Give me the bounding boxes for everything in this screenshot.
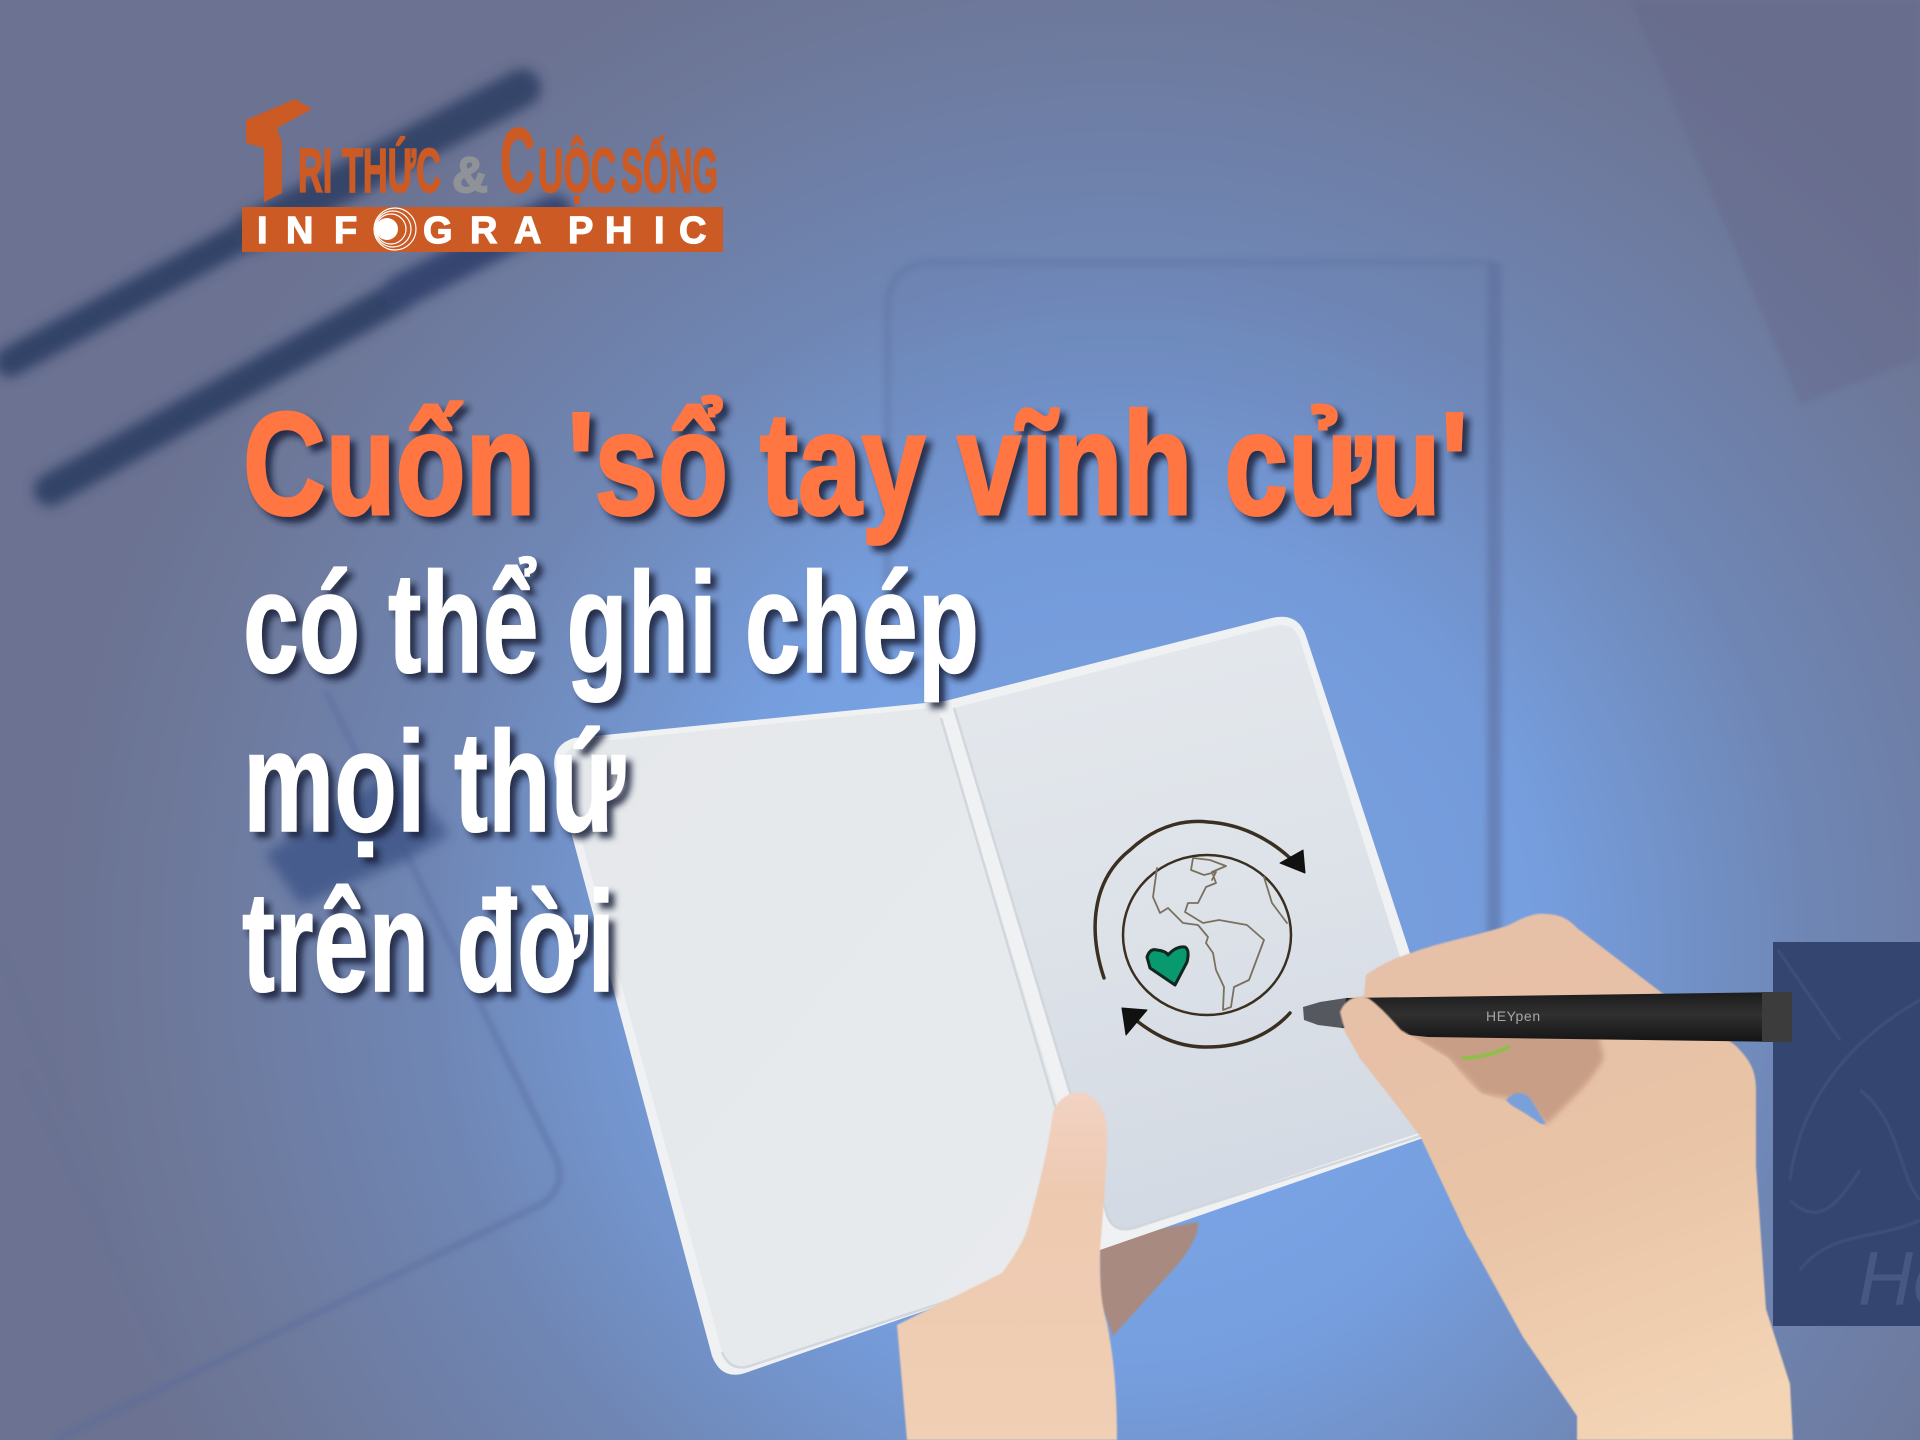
globe circle <box>1123 855 1291 1015</box>
title line 4: trên đời <box>242 863 615 1022</box>
green ring on finger <box>1462 1046 1510 1058</box>
upper arrow <box>1095 821 1305 978</box>
logo wordmark <box>298 110 718 212</box>
title <box>242 382 1468 1022</box>
logo wordmark: C <box>500 110 535 212</box>
pen label: HEYpen <box>1486 1008 1541 1024</box>
title line 2: có thể ghi chép <box>243 544 979 703</box>
gap between fingers <box>1506 1093 1546 1124</box>
left page <box>563 708 1100 1367</box>
hand behind book: fingers <box>1100 1222 1198 1336</box>
title line 1: Cuốn 'sổ tay vĩnh cửu' <box>243 382 1468 545</box>
thumb over pen <box>1340 997 1600 1300</box>
spine lines <box>722 708 1420 1367</box>
blurred notebook top right <box>1630 0 1920 405</box>
logo infographic text: INF <box>257 210 357 252</box>
palm shadow between fingers <box>1400 1030 1604 1125</box>
title line 3: mọi thứ <box>243 703 625 862</box>
heart <box>1147 947 1188 985</box>
right page <box>954 625 1452 1229</box>
hand left front: thumb and palm <box>897 1092 1117 1440</box>
continents <box>1153 858 1264 1010</box>
hand right: palm and fingers <box>1345 914 1793 1440</box>
logo wordmark: RI THỨC <box>298 137 441 206</box>
logo mark T <box>246 99 312 202</box>
dark notebook right <box>1773 942 1920 1326</box>
blurred notebook centre <box>887 262 1502 1172</box>
pen <box>1303 992 1792 1042</box>
logo: GRAPHIC <box>423 210 706 252</box>
logo wordmark: UỘC <box>538 137 616 206</box>
blurred object left <box>265 768 449 905</box>
logo wordmark: & <box>452 147 488 203</box>
logo <box>242 99 723 252</box>
open notebook <box>554 617 1463 1375</box>
blurred pen upper <box>10 88 522 362</box>
logo rings <box>374 208 416 250</box>
logo wordmark: SỐNG <box>621 137 718 206</box>
blurred pen lower <box>50 212 555 490</box>
doodle: earth with arrows and heart <box>1095 821 1305 1047</box>
lower arrow <box>1122 1008 1290 1047</box>
blurred notebook bottom left <box>0 691 560 1440</box>
logo banner <box>242 207 723 252</box>
notebook body <box>554 617 1463 1375</box>
